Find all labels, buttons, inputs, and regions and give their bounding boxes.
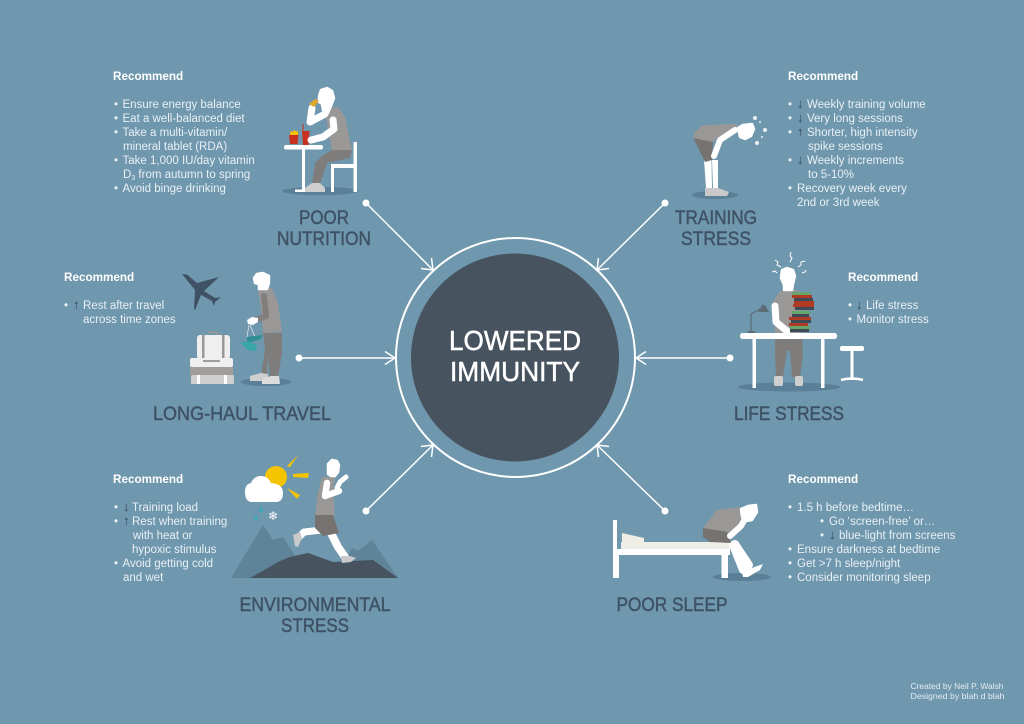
text block: training stress recommendations: •	[788, 127, 792, 139]
text block: environmental stress recommendations: •	[114, 516, 118, 528]
icon: runner in weather over mountains	[231, 455, 398, 578]
text block: long-haul travel recommendations: across time zones	[83, 314, 176, 326]
heading: training stress: TRAINING	[675, 207, 757, 229]
heading: long-haul travel: LONG-HAUL TRAVEL	[153, 403, 331, 425]
text block: poor nutrition recommendations: Avoid binge drinking	[122, 183, 226, 195]
credits	[910, 681, 1005, 701]
text block: poor sleep recommendations	[788, 473, 956, 584]
text block: poor nutrition recommendations: •	[114, 155, 118, 167]
text block: environmental stress recommendations: Recommend	[113, 473, 183, 486]
text block: training stress recommendations: •	[788, 155, 792, 167]
text block: environmental stress recommendations: •	[114, 502, 118, 514]
icon: person eating at table	[282, 88, 358, 195]
central circle: lowered immunity: IMMUNITY	[450, 356, 580, 387]
text block: poor sleep recommendations: Recommend	[788, 473, 858, 486]
text block: life stress recommendations: •	[848, 314, 852, 326]
text block: training stress recommendations: Shorter, high intensity	[807, 127, 918, 139]
text block: poor nutrition recommendations: •	[114, 113, 118, 125]
text block: poor sleep recommendations: •	[820, 530, 824, 542]
arrow: environmental stress to centre	[362, 445, 433, 514]
icon: person sitting on bed	[613, 505, 771, 581]
text block: poor nutrition recommendations: Take 1,000 IU/day vitamin	[122, 155, 255, 167]
text block: life stress recommendations: Life stress	[866, 300, 919, 312]
heading: poor sleep: POOR SLEEP	[616, 594, 728, 616]
text block: poor sleep recommendations: Consider monitoring sleep	[797, 572, 931, 584]
text block: long-haul travel recommendations	[64, 271, 176, 326]
text block: poor nutrition recommendations: Eat a well-balanced diet	[122, 113, 245, 125]
text block: poor sleep recommendations: •	[820, 516, 824, 528]
text block: environmental stress recommendations: ↑	[123, 513, 130, 528]
text block: poor sleep recommendations: Get >7 h sleep/night	[797, 558, 901, 570]
text block: environmental stress recommendations: hypoxic stimulus	[132, 544, 217, 556]
text block: long-haul travel recommendations: Recommend	[64, 271, 134, 284]
heading: poor nutrition: POOR	[299, 207, 349, 229]
text block: life stress recommendations: •	[848, 300, 852, 312]
text block: poor nutrition recommendations: Take a multi-vitamin/	[122, 127, 228, 139]
text block: poor sleep recommendations: •	[788, 502, 792, 514]
icon: aeroplane	[182, 274, 221, 310]
text block: long-haul travel recommendations: •	[64, 300, 68, 312]
text block: long-haul travel recommendations: ↑	[73, 297, 80, 312]
text block: training stress recommendations: to 5-10%	[808, 169, 854, 181]
icon: person bent over, sweating	[692, 116, 767, 199]
text block: environmental stress recommendations	[113, 473, 227, 584]
text block: life stress recommendations: ↓	[856, 297, 862, 312]
text block: poor nutrition recommendations: Ensure energy balance	[122, 99, 241, 111]
icon: stressed person with books at desk	[738, 252, 864, 392]
text block: training stress recommendations: •	[788, 113, 792, 125]
text block: environmental stress recommendations: ↓	[123, 499, 130, 514]
text block: poor nutrition recommendations: D	[123, 169, 131, 181]
text block: poor nutrition recommendations: 3	[131, 175, 135, 182]
text block: poor sleep recommendations: ↓	[829, 527, 836, 542]
text block: life stress recommendations	[848, 271, 929, 326]
text block: training stress recommendations: Recovery week every	[797, 183, 907, 195]
text block: training stress recommendations: •	[788, 183, 792, 195]
text block: poor nutrition recommendations: •	[114, 127, 118, 139]
arrow: poor nutrition to centre	[362, 200, 433, 270]
heading: poor nutrition: NUTRITION	[277, 228, 371, 250]
text block: environmental stress recommendations: with heat or	[132, 530, 193, 542]
text block: poor nutrition recommendations: from autumn to spring	[135, 169, 250, 181]
text block: long-haul travel recommendations: Rest after travel	[83, 300, 164, 312]
arrow: poor sleep to centre	[597, 445, 668, 514]
text block: environmental stress recommendations: Rest when training	[132, 516, 227, 528]
heading: training stress	[675, 207, 757, 250]
icon: traveller with luggage	[190, 273, 291, 386]
text block: environmental stress recommendations: Training load	[132, 502, 198, 514]
text block: environmental stress recommendations: and wet	[123, 572, 164, 584]
text block: training stress recommendations: ↓	[797, 152, 804, 167]
text block: training stress recommendations	[788, 70, 926, 209]
text block: training stress recommendations: Recommend	[788, 70, 858, 83]
heading: environmental stress: STRESS	[281, 615, 349, 637]
heading: training stress: STRESS	[681, 228, 751, 250]
heading: environmental stress	[240, 594, 391, 637]
credits: Designed by blah d blah	[910, 691, 1005, 701]
text block: poor sleep recommendations: blue-light from screens	[839, 530, 956, 542]
text block: poor nutrition recommendations: mineral tablet (RDA)	[123, 141, 227, 153]
text block: poor sleep recommendations: •	[788, 544, 792, 556]
text block: poor nutrition recommendations: Recommend	[113, 70, 183, 83]
text block: poor nutrition recommendations: •	[114, 99, 118, 111]
text block: poor sleep recommendations: 1.5 h before bedtime…	[797, 502, 914, 514]
text block: training stress recommendations: ↓	[797, 110, 804, 125]
central circle: lowered immunity: LOWERED	[449, 325, 581, 356]
text block: environmental stress recommendations: Avoid getting cold	[122, 558, 213, 570]
credits: Created by Neil P. Walsh	[910, 681, 1004, 691]
text block: training stress recommendations: •	[788, 99, 792, 111]
text block: poor sleep recommendations: •	[788, 558, 792, 570]
heading: poor nutrition	[277, 207, 371, 250]
text block: training stress recommendations: 2nd or 3rd week	[797, 197, 880, 209]
text block: poor nutrition recommendations: •	[114, 183, 118, 195]
text block: training stress recommendations: Very long sessions	[807, 113, 903, 125]
icon: runner in weather over mountains: ❄	[268, 509, 278, 523]
heading: environmental stress: ENVIRONMENTAL	[240, 594, 391, 616]
heading: life stress: LIFE STRESS	[734, 403, 844, 425]
text block: life stress recommendations: Monitor stress	[856, 314, 929, 326]
arrow: training stress to centre	[597, 200, 668, 270]
arrow: life stress to centre	[636, 352, 734, 364]
text block: environmental stress recommendations: •	[114, 558, 118, 570]
arrow: long-haul travel to centre	[296, 352, 395, 364]
text block: poor sleep recommendations: Go ‘screen-free’ or…	[829, 516, 935, 528]
central circle: lowered immunity	[396, 238, 635, 477]
text block: training stress recommendations: ↓	[797, 96, 804, 111]
text block: poor sleep recommendations: •	[788, 572, 792, 584]
text block: training stress recommendations: spike sessions	[808, 141, 883, 153]
text block: life stress recommendations: Recommend	[848, 271, 918, 284]
text block: training stress recommendations: ↑	[797, 124, 804, 139]
text block: poor sleep recommendations: Ensure darkness at bedtime	[797, 544, 940, 556]
text block: training stress recommendations: Weekly training volume	[807, 99, 926, 111]
text block: training stress recommendations: Weekly increments	[807, 155, 904, 167]
text block: poor nutrition recommendations	[113, 70, 255, 195]
